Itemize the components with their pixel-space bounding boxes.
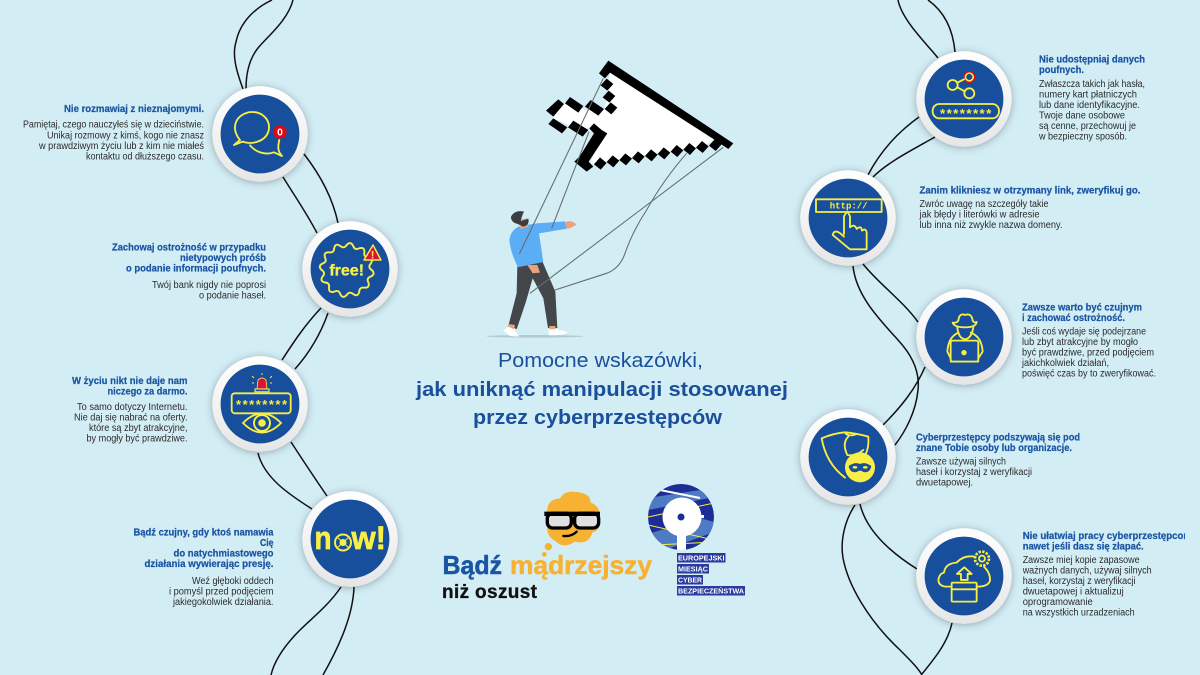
text: backups: ważnych danych, używaj silnych [1022, 566, 1152, 576]
node: siren, password and eye [212, 356, 308, 452]
text: confidential data: są cenne, przechowuj je [1039, 121, 1137, 132]
node: hacker with laptop [916, 289, 1012, 385]
illustration: man with cursor kite [487, 61, 733, 338]
node: now: n [314, 520, 332, 556]
node: shield with mask [800, 409, 896, 505]
node: cloud backup [916, 528, 1012, 624]
text: backups: oprogramowanie [1023, 597, 1093, 608]
text: backups: Nie ułatwiaj pracy cyberprzestępcom, [1023, 531, 1195, 542]
text: unusual requests: o podanie haseł. [199, 290, 266, 302]
text: backups: nawet jeśli dasz się złapać. [1023, 542, 1144, 552]
text: backups: haseł, korzystaj z weryfikacji [1023, 576, 1136, 587]
logo: European cybersecurity month: BEZPIECZEŃSTWA [678, 586, 744, 596]
text: impersonation: haseł i korzystaj z weryfikacji [916, 467, 1032, 478]
text: confidential data: numery kart płatniczych [1039, 90, 1137, 100]
text: nothing for free: W życiu nikt nie daje nam [72, 376, 188, 387]
text: nothing for free: niczego za darmo. [108, 386, 188, 398]
text: pressure: działania wywierając presję. [144, 559, 274, 570]
text: confidential data: Nie udostępniaj danych [1039, 54, 1145, 66]
text: pressure: i pomyśl przed podjęciem [169, 586, 274, 598]
text: confidential data: lub dane identyfikacyjne. [1039, 100, 1140, 111]
text: confidential data: Zwłaszcza takich jak hasła, [1039, 79, 1145, 90]
node: share password: ******** [940, 106, 992, 121]
logo: campaign wordmark: mądrzejszy [510, 550, 653, 580]
text: stay alert [1021, 303, 1156, 380]
node: now [302, 491, 398, 587]
text: stay alert: Jeśli coś wydaje się podejrzane [1022, 327, 1146, 338]
logo: European cybersecurity month: CYBER [678, 576, 702, 584]
text: verify links: jak błędy i literówki w adresie [919, 210, 1040, 220]
text: backups: Zawsze miej kopie zapasowe [1023, 555, 1140, 566]
text: nothing for free: by mogły być prawdziwe. [86, 434, 188, 444]
text: unusual requests: nietypowych próśb [180, 253, 266, 264]
text: confidential data [1038, 54, 1145, 142]
node: now: w! [351, 520, 386, 556]
text: pressure: jakiegokolwiek działania. [172, 597, 274, 608]
title: przez cyberprzestępców [473, 406, 722, 429]
text: impersonation: znane Tobie osoby lub organizacje. [916, 443, 1072, 454]
text: pressure: do natychmiastowego [174, 548, 274, 560]
node: free badge: ! [371, 250, 374, 262]
text: verify links [919, 186, 1141, 231]
text: impersonation: dwuetapowej. [916, 478, 973, 488]
text: strangers: kontaktu od dłuższego czasu. [86, 152, 204, 162]
text: confidential data: Twoje dane osobowe [1039, 110, 1126, 122]
text: pressure: Cię [260, 538, 274, 549]
text: impersonation: Zawsze używaj silnych [916, 457, 1006, 468]
logo: campaign cloud with glasses [542, 492, 600, 557]
node: conversation bubbles: 0 [277, 128, 283, 139]
text: strangers: Unikaj rozmowy z kimś, kogo nie znasz [47, 130, 204, 141]
text: stay alert: jakichkolwiek działań, [1021, 358, 1109, 369]
text: impersonation: Cyberprzestępcy podszywają się pod [916, 433, 1080, 444]
cursor [546, 61, 733, 172]
strings [519, 78, 723, 293]
node: conversation bubbles [212, 86, 308, 182]
text: impersonation [916, 433, 1080, 488]
text: stay alert: Zawsze warto być czujnym [1022, 303, 1142, 314]
text: unusual requests: Twój bank nigdy nie poprosi [152, 280, 266, 291]
text: unusual requests: o podanie informacji poufnych. [126, 264, 266, 274]
text: backups: dwuetapowej i aktualizuj [1023, 586, 1124, 598]
text: confidential data: w bezpieczny sposób. [1038, 132, 1127, 142]
text: pressure [134, 528, 274, 608]
text: stay alert: i zachować ostrożność. [1022, 313, 1125, 324]
node: siren, password and eye: ******** [236, 397, 288, 412]
text: unusual requests: Zachowaj ostrożność w przypadku [112, 243, 266, 254]
text: strangers: Nie rozmawiaj z nieznajomymi. [64, 104, 204, 115]
text: pressure: Weź głęboki oddech [192, 576, 274, 587]
text: backups: na wszystkich urzadzeniach [1023, 608, 1135, 618]
text: nothing for free: Nie daj się nabrać na oferty. [74, 412, 188, 424]
logo: European cybersecurity month [648, 484, 745, 596]
man [503, 211, 577, 337]
node: free badge: free! [329, 262, 364, 280]
logo: European cybersecurity month: EUROPEJSKI [678, 554, 724, 562]
logo: campaign wordmark: Bądź [442, 550, 502, 580]
text: nothing for free: które są zbyt atrakcyjne, [89, 423, 188, 434]
text: stay alert: lub zbyt atrakcyjne by mogło [1022, 337, 1139, 348]
connecting cords right [842, 0, 955, 675]
node: share password [916, 51, 1012, 147]
text: strangers: Pamiętaj, czego nauczyłeś się w dzieciństwie. [23, 120, 204, 131]
text: stay alert: być prawdziwe, przed podjęciem [1022, 348, 1154, 358]
ground shadow [487, 335, 583, 338]
title: Pomocne wskazówki, [498, 350, 703, 372]
title: jak uniknąć manipulacji stosowanej [415, 378, 788, 401]
connecting cords left [234, 0, 354, 675]
node: link click [800, 170, 896, 266]
title [415, 350, 788, 429]
logo: campaign wordmark: niż oszust [442, 582, 538, 603]
text: verify links: Zwróc uwagę na szczegóły takie [920, 199, 1049, 210]
node: link click: http:// [830, 202, 868, 212]
logo: European cybersecurity month: MIESIĄC [678, 564, 708, 574]
text: strangers: w prawdziwym życiu lub z kim nie miałeś [38, 141, 204, 152]
text: verify links: Zanim klikniesz w otrzymany link, zweryfikuj go. [920, 186, 1141, 197]
text: nothing for free [72, 376, 188, 444]
text: backups [1022, 531, 1195, 618]
text: confidential data: poufnych. [1039, 65, 1084, 76]
text: pressure: Bądź czujny, gdy ktoś namawia [134, 528, 274, 538]
text: nothing for free: To samo dotyczy Internetu. [77, 402, 188, 413]
logo: campaign wordmark [442, 550, 653, 603]
text: verify links: lub inna niż zwykle nazwa domeny. [920, 220, 1062, 231]
text: unusual requests [112, 243, 266, 302]
node: free badge [302, 221, 398, 317]
text: stay alert: poświęć czas by to zweryfikować. [1022, 368, 1156, 380]
text: strangers [23, 104, 204, 162]
